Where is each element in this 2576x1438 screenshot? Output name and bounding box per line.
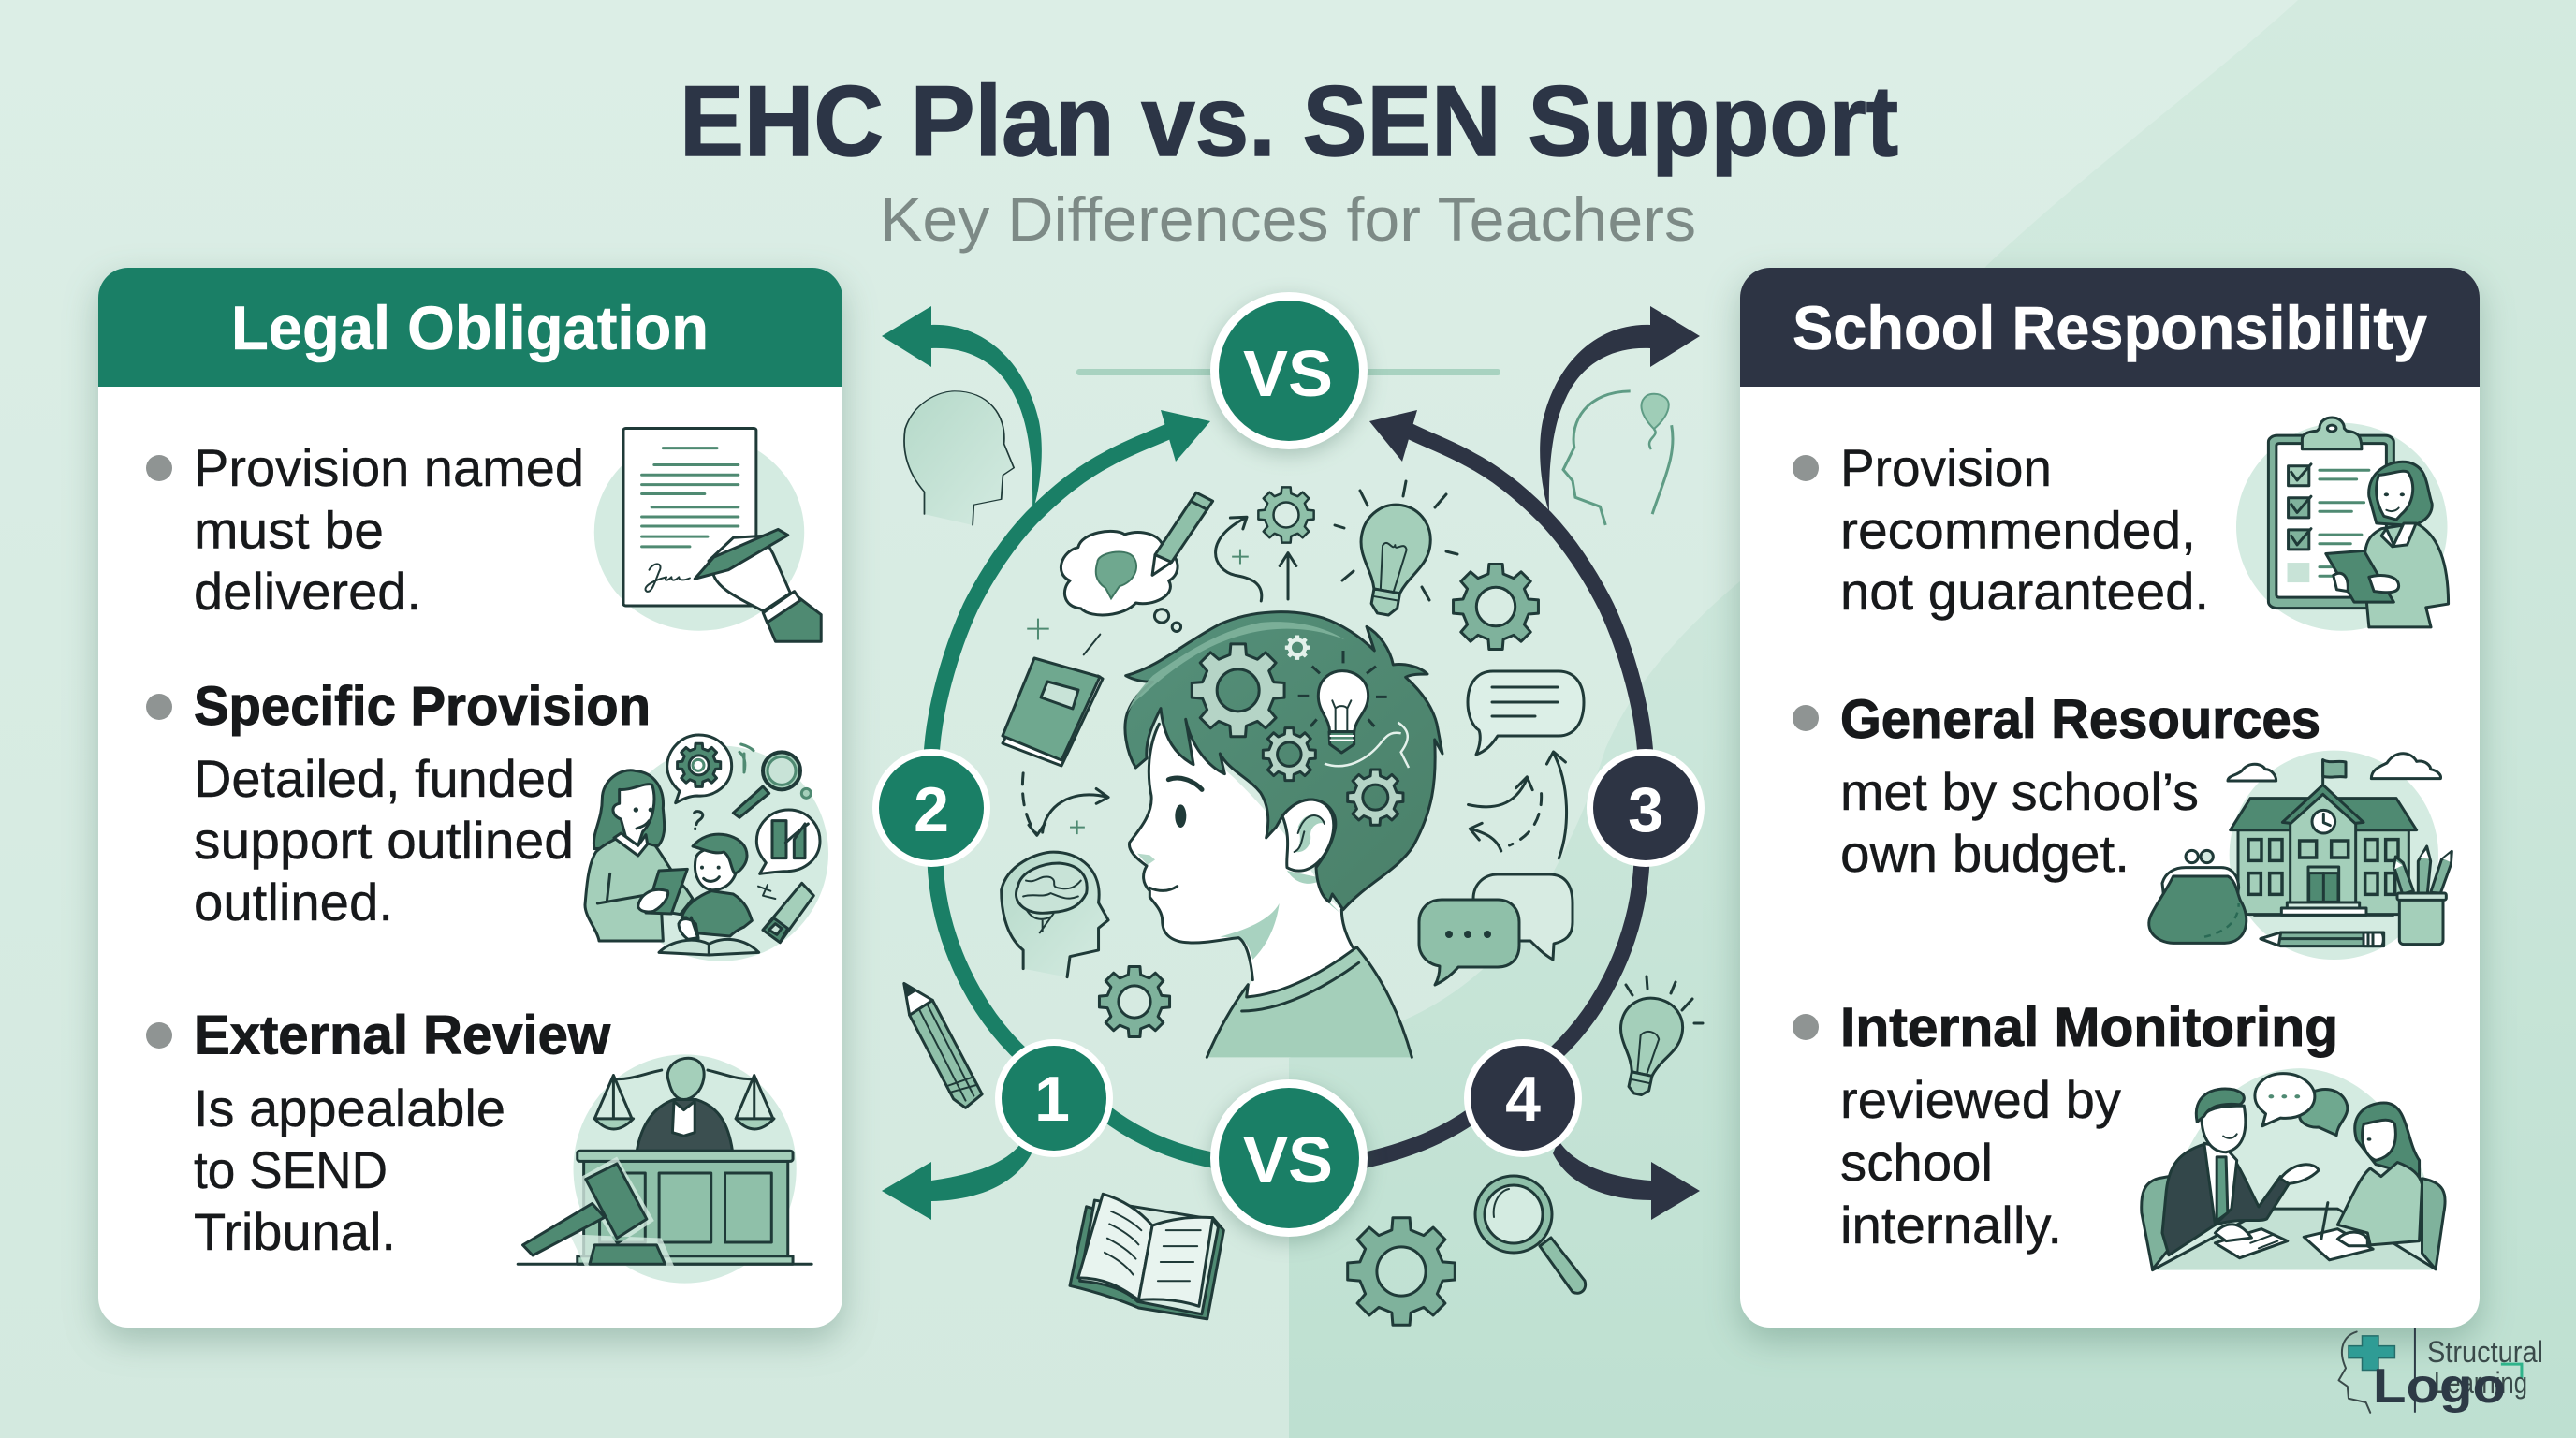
icon: light bulb top (1349, 499, 1436, 620)
heading: school responsibility: School Responsibility (1793, 293, 2427, 362)
bullet 3 left: External Review (194, 1005, 611, 1065)
badge: 4: 4 (1505, 1064, 1541, 1135)
icon: brain head (1002, 852, 1108, 977)
badge: VS top (1210, 292, 1368, 449)
arrow: bottom left outward (882, 1140, 1032, 1220)
bullet 2 right: General Resources (1840, 689, 2320, 750)
bullet 3 right: Internal Monitoring (1840, 997, 2338, 1058)
bullet 2 right: own budget. (1840, 824, 2130, 883)
bullet 2 right: met by school’s (1840, 762, 2199, 821)
logo text: structural: Structural (2427, 1335, 2543, 1369)
bullet 2 left: Detailed, funded (194, 749, 575, 808)
icon: gear right (1454, 565, 1538, 649)
icon: two colleagues meeting (2142, 1068, 2445, 1270)
logo divider (2414, 1328, 2416, 1413)
bullet 2 left: Specific Provision (194, 676, 651, 737)
badge: 2 (872, 749, 990, 867)
arrow: top right outward (1540, 306, 1700, 512)
logo cross mark (2349, 1336, 2394, 1371)
bullet 3 right: reviewed by (1840, 1070, 2121, 1129)
arc: dark upper (1369, 410, 1646, 758)
subtitle: Key Differences for Teachers (880, 184, 1696, 254)
bullet 2 left: outlined. (194, 873, 393, 932)
icon: thought cloud with brain (1022, 492, 1567, 858)
badge: VS top: VS (1243, 337, 1333, 410)
icon: pencil (904, 983, 982, 1108)
bullet 3 left: to SEND (194, 1140, 388, 1199)
illustration: child head with gears (1125, 612, 1442, 1057)
icon: gear top (1258, 487, 1314, 543)
arc: green upper (931, 410, 1210, 758)
icon: clipboard and teacher (2236, 418, 2449, 631)
arrow: bottom right outward (1553, 1140, 1700, 1220)
diagram: central cycle (872, 292, 1705, 1325)
bullet 1 right: recommended, (1840, 500, 2196, 560)
icon: head outline with balloon right (1563, 391, 1673, 525)
bullet 3 left: Tribunal. (194, 1202, 396, 1261)
bullet 2 left: support outlined (194, 811, 574, 870)
icon: book left (1003, 658, 1103, 766)
bullet 1 left (146, 438, 584, 621)
icon: teacher and child (585, 735, 828, 961)
bullet 3 right: school (1840, 1133, 1993, 1192)
bullet 2 left (146, 676, 651, 932)
icon: speech bubble (1468, 671, 1584, 755)
bullet 3 right: internally. (1840, 1196, 2062, 1255)
icon: judge and gavel (518, 1054, 812, 1284)
panel: legal obligation (98, 268, 842, 1328)
badge: 3 (1587, 749, 1705, 867)
icon: light bulb lower right (1607, 992, 1688, 1101)
icon: school with purse and pencils (2149, 751, 2452, 960)
logo (2338, 1328, 2522, 1413)
arc: green lower (935, 861, 1217, 1161)
logo text: learning: Learning (2434, 1366, 2527, 1400)
divider line behind top VS (1076, 369, 1500, 375)
card background left (98, 268, 842, 1328)
icon: gear lower left (1099, 966, 1170, 1037)
badge: 1: 1 (1034, 1064, 1070, 1135)
bullet 2 right (1793, 689, 2320, 883)
icon: gear bottom (1348, 1218, 1455, 1325)
bulb rays lower right (1626, 976, 1703, 1023)
badge: 2: 2 (914, 774, 949, 845)
card background right (1740, 268, 2480, 1328)
icon: double speech bubbles (1419, 874, 1573, 985)
icon: signing document (594, 429, 821, 641)
panel: school responsibility (1740, 268, 2480, 1328)
bullet 3 right (1793, 997, 2338, 1255)
bullet 1 left: delivered. (194, 562, 421, 621)
icon: magnifier (1475, 1176, 1586, 1293)
arc: dark lower (1362, 861, 1642, 1161)
badge: VS bottom (1210, 1079, 1368, 1237)
bullet 1 right: not guaranteed. (1840, 562, 2209, 621)
bullet 3 left: Is appealable (194, 1078, 505, 1137)
badge: 4 (1464, 1039, 1582, 1157)
logo text: logo: Logo (2373, 1359, 2506, 1414)
arrow: top left outward (882, 306, 1042, 512)
bullet 1 right (1793, 438, 2209, 621)
bullet 3 left (146, 1005, 611, 1261)
badge: 3: 3 (1628, 774, 1663, 845)
icon: head silhouette left (904, 391, 1014, 525)
heading: legal obligation: Legal Obligation (231, 293, 709, 362)
icon: open book (1070, 1194, 1223, 1319)
bullet 1 left: must be (194, 500, 384, 560)
bulb rays (1335, 481, 1457, 600)
badge: 1 (995, 1039, 1113, 1157)
logo accent (2501, 1364, 2522, 1378)
bullet 1 left: Provision named (194, 438, 584, 497)
title: EHC Plan vs. SEN Support (680, 65, 1898, 177)
bullet 1 right: Provision (1840, 438, 2052, 497)
badge: VS bottom: VS (1243, 1123, 1333, 1196)
logo head outline (2338, 1332, 2370, 1413)
